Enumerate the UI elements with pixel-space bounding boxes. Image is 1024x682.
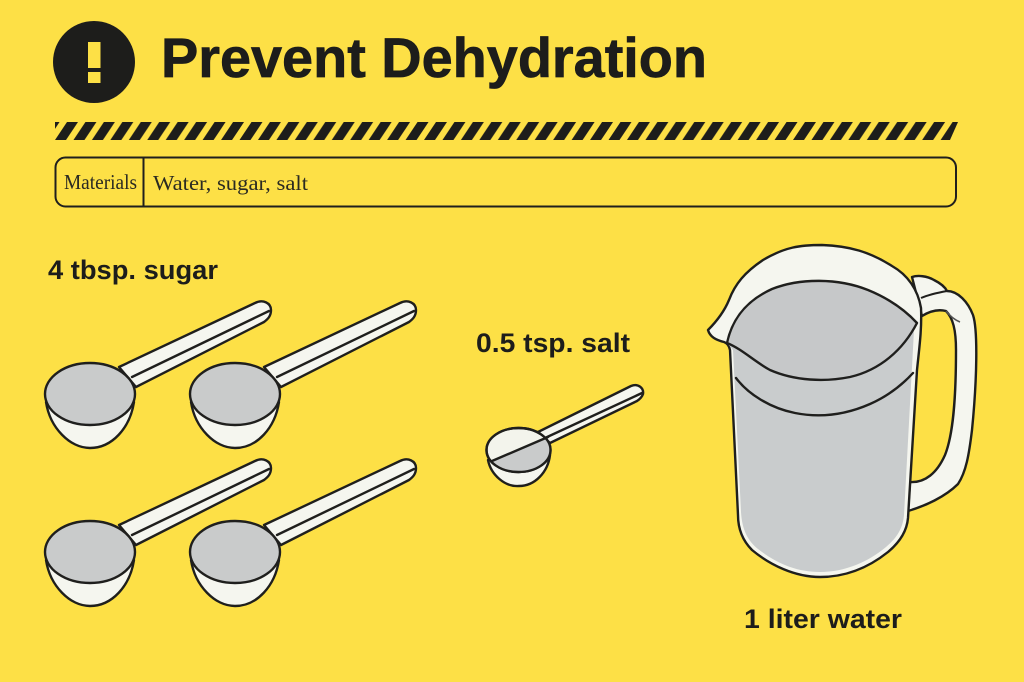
title: Prevent Dehydration [161, 26, 707, 89]
materials label: Materials [64, 170, 137, 194]
icon: exclamation warning [53, 21, 135, 103]
icon: water pitcher [708, 245, 976, 577]
pitcher inner line [736, 373, 913, 415]
icon: tablespoon 1 [45, 301, 271, 448]
label: water amount: 1 liter water [744, 604, 902, 634]
label: salt amount: 0.5 tsp. salt [476, 328, 630, 358]
icon: tablespoon 3 [45, 459, 271, 606]
label: sugar amount: 4 tbsp. sugar [48, 255, 218, 285]
pitcher body [708, 245, 921, 577]
icon: tablespoon 2 [190, 301, 416, 448]
water surface [727, 281, 917, 380]
materials list: Water, sugar, salt [153, 171, 308, 195]
materials panel [56, 158, 956, 206]
hazard stripe divider [55, 122, 958, 140]
water body [727, 323, 917, 572]
pitcher handle [908, 276, 976, 511]
icon: half-filled teaspoon [486, 385, 643, 486]
icon: tablespoon 4 [190, 459, 416, 606]
